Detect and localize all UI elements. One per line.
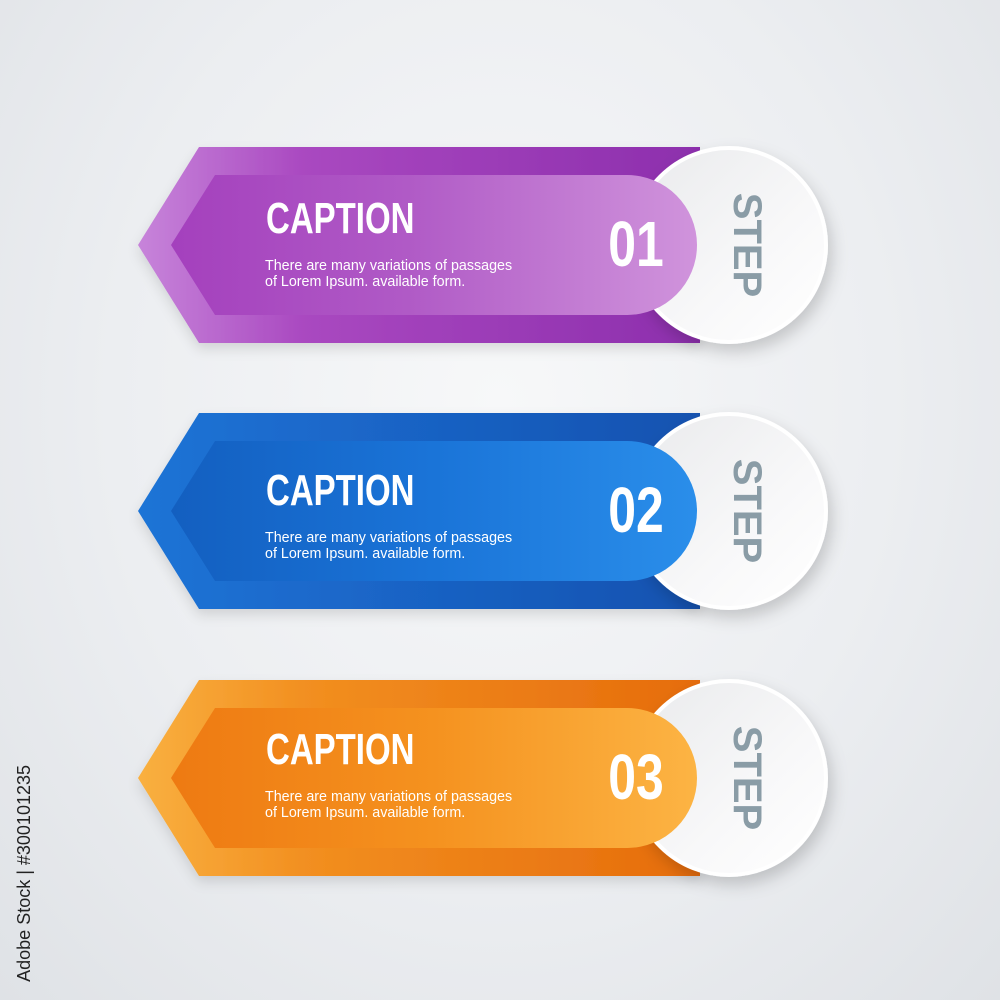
inner arrow 2	[171, 441, 697, 581]
number 3: 03	[608, 742, 664, 813]
text 2: There are many variations of passages	[265, 530, 512, 546]
number 2: 02	[608, 475, 664, 546]
text 3: of Lorem Ipsum. available form.	[265, 805, 465, 821]
label STEP 2: STEP	[725, 459, 769, 563]
label STEP 3: STEP	[725, 726, 769, 830]
text 3: There are many variations of passages	[265, 789, 512, 805]
outer arrow 2	[138, 413, 700, 609]
step 1	[138, 147, 826, 343]
circle 1	[632, 148, 826, 342]
text 1: There are many variations of passages	[265, 258, 512, 274]
outer arrow 1	[138, 147, 700, 343]
number 1: 01	[608, 209, 664, 280]
heading 3: CAPTION	[266, 726, 414, 774]
heading 1: CAPTION	[266, 195, 414, 243]
label STEP 1: STEP	[725, 193, 769, 297]
circle 2	[632, 414, 826, 608]
stock id side text: Adobe Stock | #300101235	[14, 765, 34, 982]
heading 2: CAPTION	[266, 467, 414, 515]
inner arrow 1	[171, 175, 697, 315]
text 1: of Lorem Ipsum. available form.	[265, 274, 465, 290]
text 2: of Lorem Ipsum. available form.	[265, 546, 465, 562]
outer arrow 3	[138, 680, 700, 876]
inner arrow 3	[171, 708, 697, 848]
step 3	[138, 680, 826, 876]
step 2	[138, 413, 826, 609]
circle 3	[632, 681, 826, 875]
